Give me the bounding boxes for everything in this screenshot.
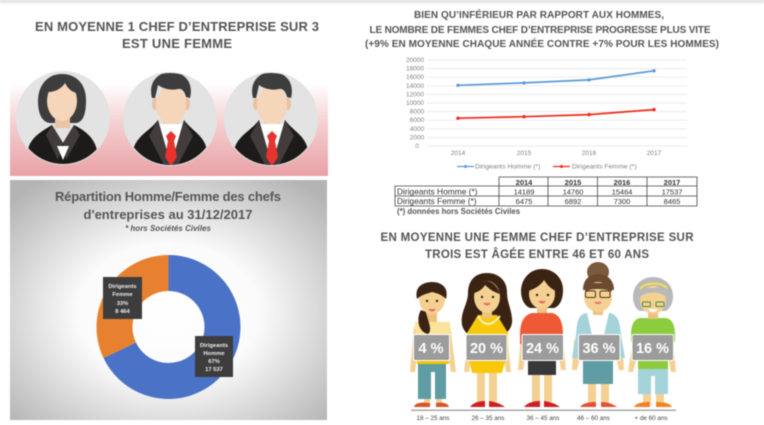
x axis labels: 2017 — [647, 150, 662, 157]
legend: Dirigeants Femme (*) — [572, 164, 637, 170]
y axis labels: 10000 — [406, 100, 424, 107]
title: age: TROIS EST ÂGÉE ENTRE 46 ET 60 ANS — [425, 248, 649, 261]
donut segment: women — [96, 255, 168, 358]
y axis labels: 12000 — [406, 91, 424, 98]
table header: 2014 — [516, 178, 533, 187]
person: 36-45 — [518, 269, 566, 407]
person: 18-25 — [410, 282, 456, 407]
line chart — [406, 57, 687, 170]
title: growth: (+9% EN MOYENNE CHAQUE ANNÉE CONTRE +7% POUR LES HOMMES) — [365, 37, 719, 50]
heading: donut chart: Répartition Homme/Femme des chefs — [55, 189, 281, 204]
data table — [395, 177, 697, 206]
label: 24 %: 24 % — [526, 341, 559, 357]
y axis labels: 20000 — [406, 57, 424, 64]
title: growth: LE NOMBRE DE FEMMES CHEF D’ENTREPRISE PROGRESSE PLUS VITE — [370, 25, 711, 36]
label: 36 %: 36 % — [582, 341, 616, 357]
table footnote: (*) données hors Sociétés Civiles — [397, 207, 521, 216]
person: 46-60 — [572, 262, 625, 407]
age labels: 26 – 35 ans — [472, 415, 504, 422]
table row: men: 15464 — [612, 188, 632, 196]
x axis labels: 2014 — [451, 150, 466, 157]
y axis labels: 8000 — [410, 109, 425, 116]
note: scope: * hors Sociétés Civiles — [125, 224, 211, 233]
callout: men: 67% — [208, 359, 220, 365]
panel: avatars — [10, 71, 328, 176]
title: one in three: EST UNE FEMME — [122, 36, 232, 51]
table header: 2017 — [664, 178, 680, 187]
panel: donut chart — [10, 180, 327, 420]
table row: men: 14760 — [563, 188, 583, 196]
label: 20 %: 20 % — [470, 341, 503, 357]
table header — [516, 178, 680, 187]
age labels: 46 – 60 ans — [577, 415, 610, 422]
y axis labels: 2000 — [410, 134, 425, 141]
age labels: + de 60 ans — [634, 415, 668, 422]
table row: women — [397, 196, 680, 206]
y axis labels: 16000 — [406, 74, 424, 81]
y axis labels: 18000 — [406, 66, 424, 73]
line: men — [456, 69, 656, 87]
label: 4 % — [414, 334, 450, 360]
callout: women: 33% — [117, 301, 128, 307]
table row: men: 14189 — [514, 188, 534, 196]
legend: Dirigeants Homme (*) — [475, 164, 540, 170]
title: growth — [365, 8, 719, 50]
x axis labels — [451, 150, 662, 157]
y axis labels: 4000 — [410, 126, 425, 133]
legend — [457, 164, 637, 170]
title: one in three — [35, 19, 319, 51]
age labels — [417, 415, 668, 422]
table row: women: Dirigeants Femme (*) — [397, 196, 477, 206]
y axis labels — [406, 57, 425, 150]
callout: women: Dirigeants — [108, 284, 137, 290]
age labels: 36 – 45 ans — [527, 415, 559, 422]
label: 16 %: 16 % — [636, 341, 669, 357]
x axis labels: 2015 — [517, 150, 532, 157]
icon: woman executive — [16, 71, 110, 170]
title: growth: BIEN QU’INFÉRIEUR PAR RAPPORT AUX HOMMES, — [414, 8, 664, 21]
y axis labels: 0 — [415, 143, 419, 150]
label: 20 % — [466, 334, 507, 360]
callout: men: 17 537 — [205, 367, 223, 373]
callout: men: Homme — [203, 351, 225, 357]
table row: women: 7300 — [614, 197, 630, 206]
icon: man executive — [123, 72, 217, 170]
donut segment: men — [104, 255, 240, 399]
table row: women: 6475 — [516, 197, 532, 206]
heading: second line: d'entreprises au 31/12/2017 — [84, 207, 252, 222]
label: 16 % — [632, 334, 674, 360]
label: 36 % — [578, 334, 620, 360]
table header: 2016 — [614, 178, 630, 187]
table header: 2015 — [565, 178, 581, 187]
callout: women: Femme — [112, 292, 133, 298]
x axis labels: 2016 — [582, 150, 597, 157]
callout: women — [103, 277, 142, 319]
age illustration — [410, 262, 676, 422]
title: age: EN MOYENNE UNE FEMME CHEF D’ENTREPRISE SUR — [380, 232, 694, 244]
table row: men: 17537 — [662, 188, 682, 196]
label: 4 %: 4 % — [418, 341, 444, 357]
label: 24 % — [522, 334, 564, 360]
line: women — [456, 108, 656, 120]
callout: men — [195, 336, 233, 377]
callout: women: 8 464 — [115, 309, 131, 315]
table row: men — [397, 186, 682, 196]
icon: man executive — [224, 72, 318, 170]
person: over 60 — [628, 277, 676, 407]
table row: women: 6892 — [565, 197, 581, 206]
y axis labels: 14000 — [406, 83, 424, 90]
table row: women: 8465 — [664, 197, 680, 206]
person: 26-35 — [462, 273, 512, 407]
age labels: 18 – 25 ans — [417, 415, 449, 422]
title: age — [380, 232, 694, 261]
callout: men: Dirigeants — [200, 343, 228, 349]
y axis labels: 6000 — [410, 117, 425, 124]
table row: men: Dirigeants Homme (*) — [397, 186, 478, 196]
title: one in three: EN MOYENNE 1 CHEF D’ENTREPRISE SUR 3 — [35, 19, 319, 34]
